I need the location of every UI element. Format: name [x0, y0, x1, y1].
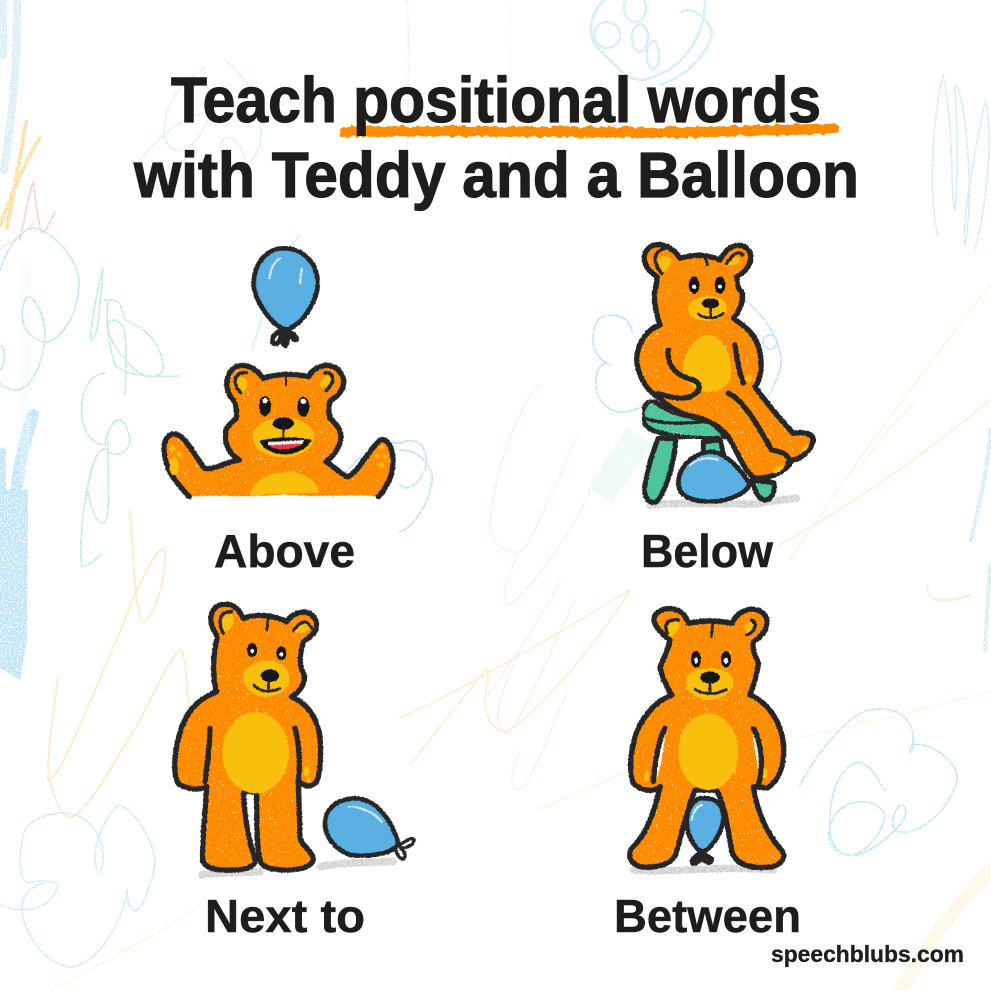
scribble: lower-left blue block	[0, 265, 33, 680]
orange crayon underline	[345, 129, 834, 132]
scribble: top blue loops	[591, 0, 712, 85]
icon: balloon	[687, 798, 723, 863]
scribble: right edge marks	[928, 430, 990, 650]
label: next to: Next to	[205, 890, 365, 942]
illustration: bear with balloon next to it	[175, 604, 414, 875]
illustration: bear with balloon between its legs	[630, 608, 784, 871]
bear details	[655, 248, 810, 475]
icon: bear body	[637, 245, 813, 478]
scribble: green loops	[81, 268, 178, 567]
scribble: yellow and pink left marks	[0, 122, 55, 248]
label: between: Between	[614, 890, 801, 942]
scribble: yellow zigzag lower left	[48, 510, 190, 817]
scribble: top-left blue strokes	[3, 0, 17, 170]
icon: bear body	[175, 604, 321, 870]
bear details	[205, 612, 312, 793]
panel: next to	[175, 604, 414, 942]
panel: between	[614, 608, 801, 942]
scribble: bottom-left blue loops	[0, 805, 155, 967]
brand url: speechblubs.com	[771, 941, 964, 967]
scribble: left blue loops	[0, 228, 79, 390]
bear details	[644, 620, 767, 790]
illustration: bear with balloon above	[164, 248, 393, 497]
scribble: blue loops behind the title	[139, 60, 261, 191]
panel: below	[637, 245, 813, 577]
scribble: blue loop lower right	[800, 709, 957, 855]
title line 2: with Teddy and a Balloon	[133, 139, 859, 211]
ground shadow	[633, 868, 773, 871]
icon: bear body	[630, 608, 784, 867]
ground shadow	[650, 498, 797, 505]
panel: above	[164, 248, 393, 577]
scribble: faint pink loops	[405, 0, 590, 790]
scribble: blue loops behind bears	[252, 235, 781, 532]
bear details	[169, 373, 387, 475]
scribble: long yellow diagonals	[50, 285, 991, 990]
icon: balloon	[678, 452, 749, 502]
title line 1: Teach positional words	[171, 64, 821, 136]
scribble: yellow crayon corner	[900, 870, 991, 991]
label: below: Below	[641, 525, 773, 577]
icon: stool	[642, 400, 774, 502]
icon: bear body	[164, 365, 393, 497]
ground shadow	[202, 861, 393, 875]
icon: balloon	[254, 248, 318, 346]
icon: balloon	[325, 798, 414, 859]
scribble: green crayon patch	[600, 435, 640, 495]
scribble: right blue tall loops	[933, 75, 989, 250]
title	[133, 64, 859, 211]
illustration: bear on stool with balloon below	[637, 245, 813, 505]
label: above: Above	[214, 525, 355, 577]
